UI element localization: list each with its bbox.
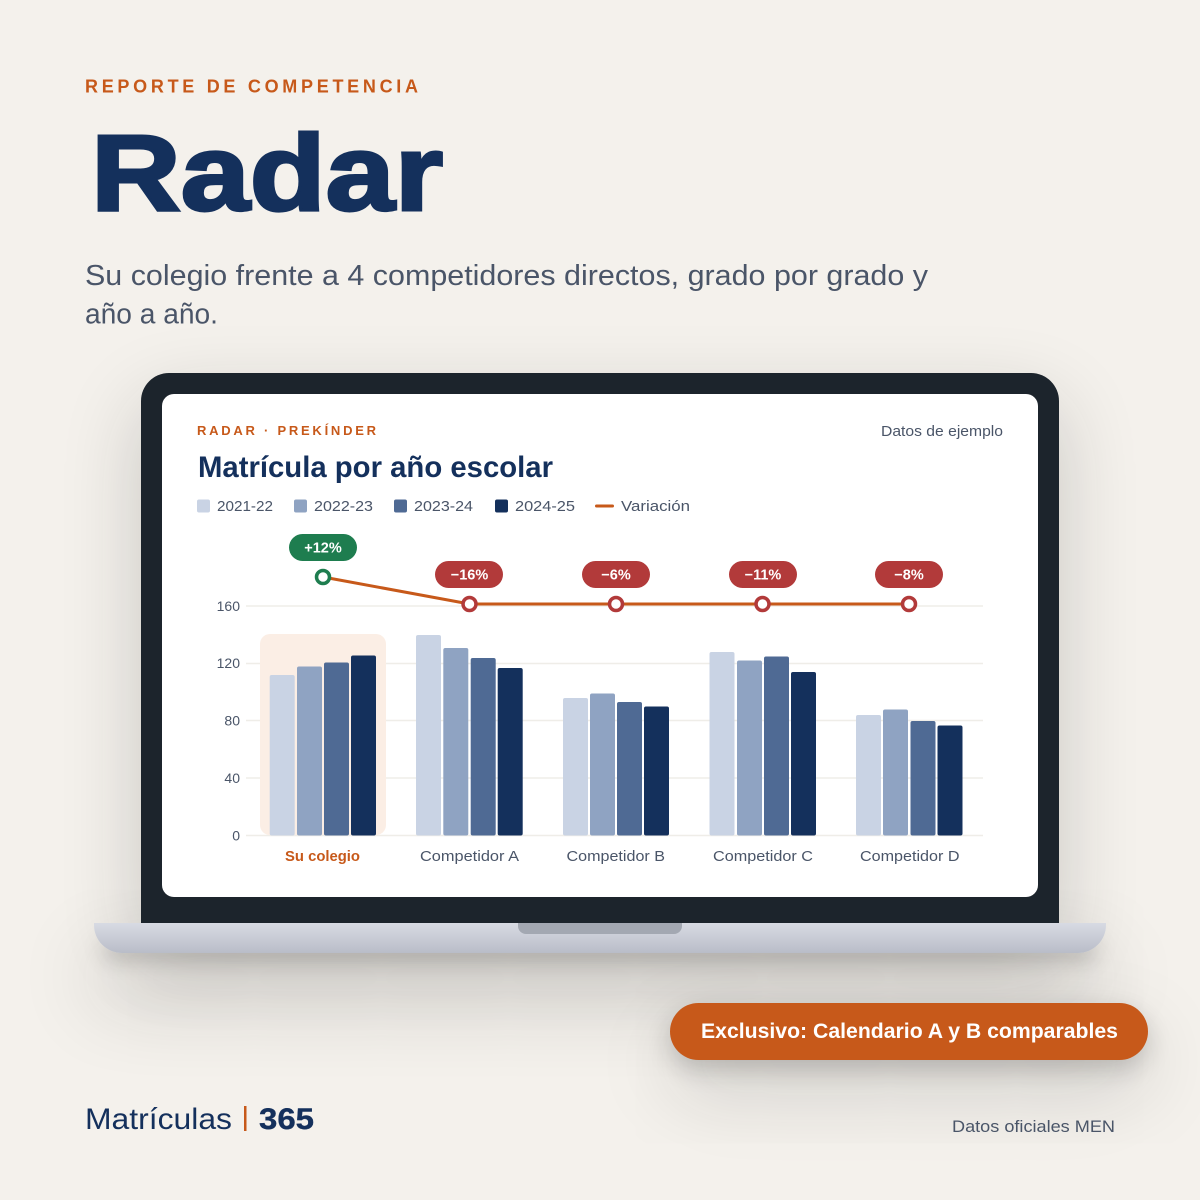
highlight: su colegio — [260, 634, 386, 835]
variation badges — [289, 534, 943, 588]
variation badges: −16% — [451, 568, 488, 584]
callout pill: Exclusivo: Calendario A y B comparables — [701, 1020, 1118, 1043]
callout pill — [670, 1003, 1148, 1060]
legend: 2023-24 — [414, 498, 473, 515]
header block — [85, 76, 929, 330]
laptop base — [94, 923, 1106, 953]
trackpad notch — [518, 923, 682, 934]
screen panel — [162, 394, 1038, 897]
category labels — [285, 849, 960, 865]
category labels: Competidor B — [566, 849, 665, 865]
y axis labels: 0 — [232, 828, 240, 844]
source note: Datos oficiales MEN — [952, 1117, 1115, 1136]
variation badges: +12% — [304, 540, 342, 556]
brand: Matrículas — [85, 1103, 232, 1136]
bars: competidor A — [416, 635, 523, 836]
sample data note: Datos de ejemplo — [881, 423, 1003, 440]
y axis labels — [217, 598, 240, 844]
variation line — [323, 577, 909, 604]
bars: competidor B — [563, 694, 669, 836]
category labels: Su colegio — [285, 849, 360, 865]
legend: Variación — [621, 498, 690, 515]
chart panel — [197, 423, 1003, 865]
footer — [85, 1103, 1115, 1136]
title: Radar — [91, 113, 443, 233]
eyebrow: REPORTE DE COMPETENCIA — [85, 76, 418, 96]
laptop lid — [141, 373, 1059, 923]
panel eyebrow: RADAR · PREKÍNDER — [197, 423, 377, 438]
legend: 2024-25 — [515, 498, 575, 515]
subtitle: Su colegio frente a 4 competidores directos, grado por grado y — [85, 260, 929, 292]
category labels: Competidor C — [713, 849, 813, 865]
category labels: Competidor D — [860, 849, 960, 865]
category labels: Competidor A — [420, 849, 519, 865]
y axis labels: 160 — [217, 598, 240, 614]
variation badges: −6% — [601, 568, 631, 584]
bars: competidor C — [710, 652, 816, 836]
laptop — [83, 370, 1117, 1032]
variation badges: −11% — [745, 568, 781, 584]
legend: 2022-23 — [314, 498, 373, 515]
y axis labels: 40 — [224, 770, 240, 786]
legend — [197, 498, 690, 515]
variation badges: −8% — [894, 568, 924, 584]
brand: 365 — [259, 1103, 314, 1136]
y axis labels: 80 — [224, 712, 240, 728]
y axis labels: 120 — [217, 655, 240, 671]
chart heading: Matrícula por año escolar — [198, 451, 553, 484]
subtitle — [85, 260, 929, 330]
line markers — [316, 570, 916, 610]
legend: 2021-22 — [217, 498, 273, 515]
brand — [85, 1103, 314, 1136]
subtitle: año a año. — [85, 298, 218, 330]
bars: competidor D — [856, 710, 962, 836]
bars: su colegio — [270, 656, 376, 836]
